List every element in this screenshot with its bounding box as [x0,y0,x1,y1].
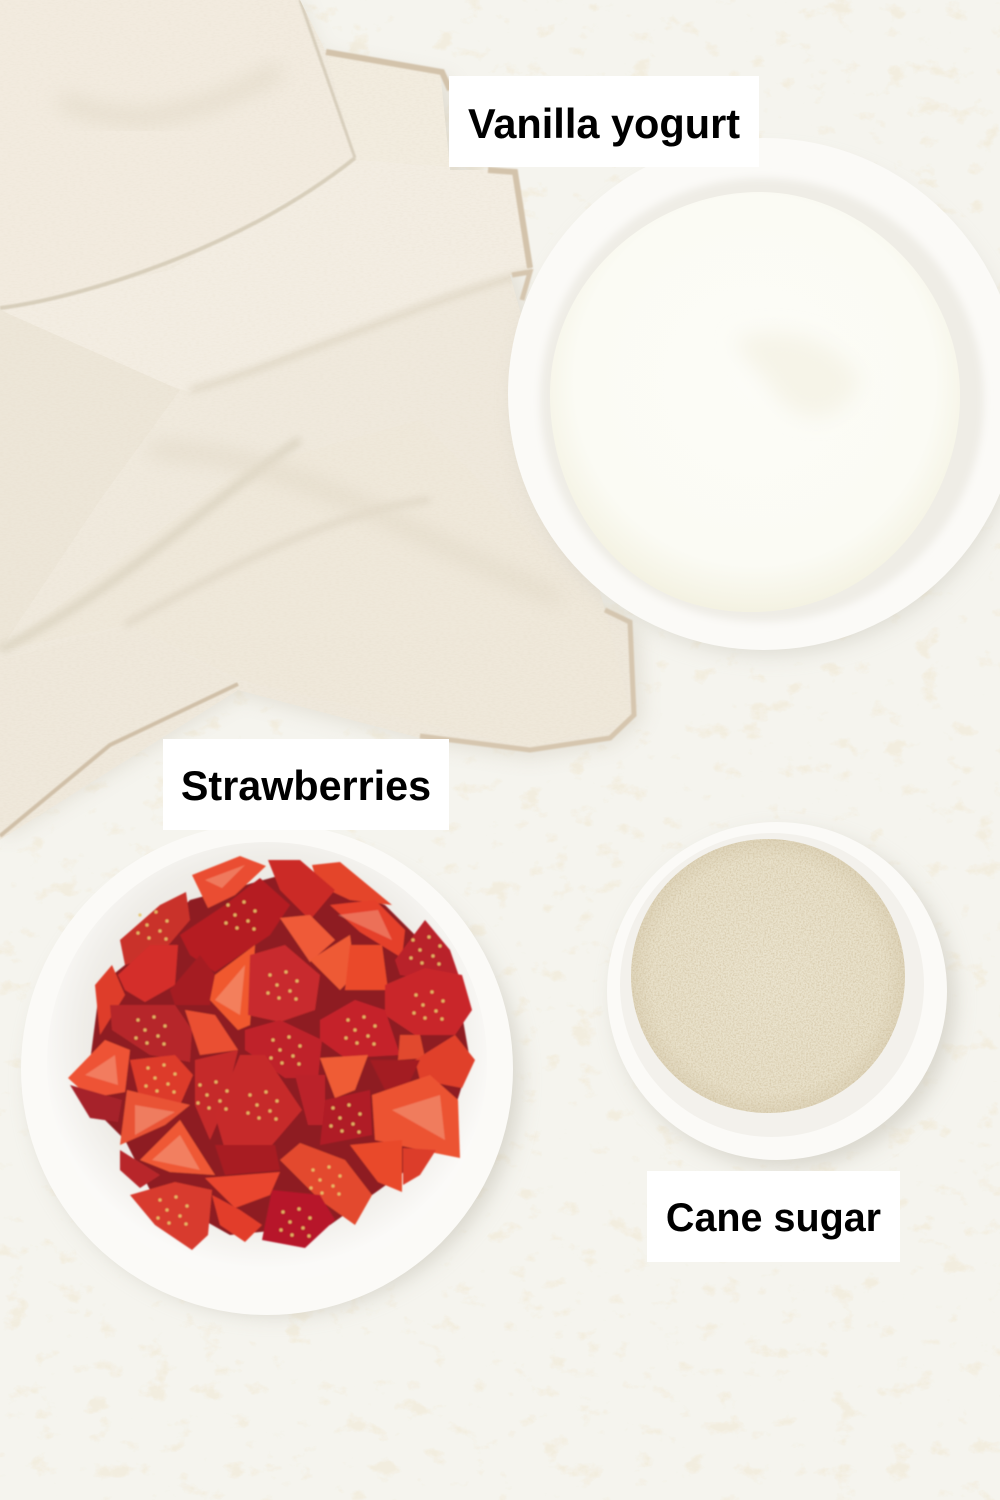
yogurt bowl [508,138,1000,655]
strawberry bowl [21,823,520,1315]
label: Strawberries: Strawberries [181,763,431,809]
strawberries [68,856,475,1250]
sugar bowl [607,822,955,1168]
label: Strawberries [163,739,449,830]
cane sugar [630,838,906,1114]
label: Vanilla yogurt: Vanilla yogurt [468,100,740,147]
cloth napkin [0,0,650,850]
label: Cane sugar [647,1171,900,1262]
label: Vanilla yogurt [449,76,759,167]
yogurt [550,192,960,612]
label: Cane sugar: Cane sugar [666,1196,881,1240]
